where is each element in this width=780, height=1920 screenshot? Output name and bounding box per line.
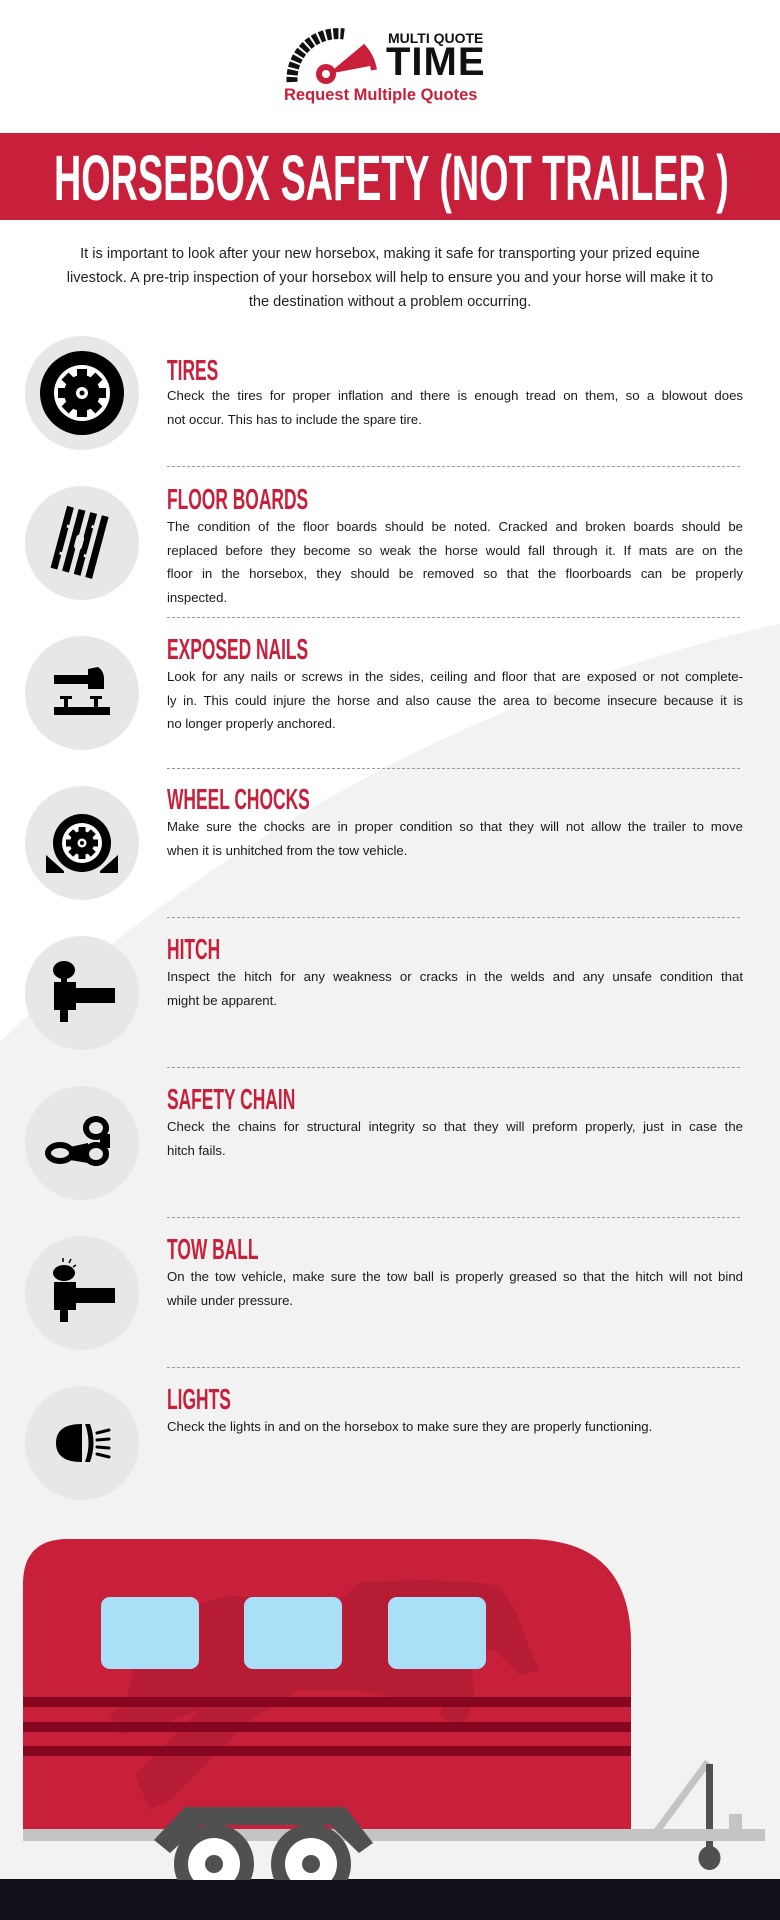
icon: wheel chocks <box>25 786 139 900</box>
stripes <box>23 1697 631 1756</box>
icon: lights <box>25 1386 139 1500</box>
icon: hitch <box>25 936 139 1050</box>
panel: safety chain: SAFETY CHAIN <box>167 1084 295 1116</box>
panel: hitch: Inspect the hitch for any weakness or cracks in the welds and any unsafe condition that <box>167 969 743 984</box>
panel: lights: Check the lights in and on the horsebox to make sure they are properly functioning. <box>167 1419 652 1434</box>
panel: tow ball: while under pressure. <box>167 1292 293 1308</box>
icon: floor boards <box>25 486 139 600</box>
trailer body <box>23 1539 631 1829</box>
panel: tow ball <box>167 1234 743 1308</box>
panel: wheel chocks: when it is unhitched from the tow vehicle. <box>167 842 407 858</box>
panel: floor boards: The condition of the floor boards should be noted. Cracked and broken boards should be <box>167 519 743 534</box>
panel: hitch <box>167 934 743 1008</box>
intro text: livestock. A pre-trip inspection of your horsebox will help to ensure you and your horse will make it to <box>67 270 713 286</box>
intro text <box>67 246 713 310</box>
panel: hitch: HITCH <box>167 934 220 966</box>
panel: floor boards: FLOOR BOARDS <box>167 484 308 516</box>
panel: tires <box>167 355 743 426</box>
panel: exposed nails: Look for any nails or screws in the sides, ceiling and floor that are exposed or not complete- <box>167 669 743 684</box>
icon: tow ball <box>25 1236 139 1350</box>
logo: MULTI QUOTE <box>388 30 483 46</box>
icons column <box>25 336 139 1500</box>
logo <box>284 28 486 104</box>
axle bracket <box>154 1807 373 1853</box>
panel: wheel chocks: Make sure the chocks are in proper condition so that they will not allow the trailer to move <box>167 819 743 834</box>
panel: safety chain <box>167 1084 743 1158</box>
panel: lights <box>167 1384 652 1434</box>
logo: TIME <box>386 40 486 84</box>
panel: exposed nails <box>167 634 743 731</box>
panel: tires: TIRES <box>167 355 218 387</box>
hitch stand <box>657 1762 742 1870</box>
panel: floor boards: inspected. <box>167 590 227 604</box>
chassis <box>23 1829 765 1841</box>
panel: tires: not occur. This has to include the spare tire. <box>167 412 422 426</box>
windows <box>101 1597 486 1669</box>
icon: exposed nails <box>25 636 139 750</box>
panel: exposed nails: EXPOSED NAILS <box>167 634 308 666</box>
panel: lights: LIGHTS <box>167 1384 231 1416</box>
panel: floor boards: floor in the horsebox, they should be removed so that the floorboards can be properly <box>167 566 743 581</box>
panel: safety chain: Check the chains for structural integrity so that they will preform properly, just in case the <box>167 1119 743 1134</box>
panel: tow ball: TOW BALL <box>167 1234 258 1266</box>
logo: Request Multiple Quotes <box>284 86 477 104</box>
panel: tow ball: On the tow vehicle, make sure the tow ball is properly greased so that the hitch will not bind <box>167 1269 743 1284</box>
panel: wheel chocks: WHEEL CHOCKS <box>167 784 310 816</box>
horsebox illustration <box>23 1539 765 1880</box>
wheels <box>174 1824 351 1904</box>
panel: exposed nails: no longer properly anchored. <box>167 716 336 731</box>
horse silhouette <box>110 1580 540 1810</box>
panel: tires: Check the tires for proper inflation and there is enough tread on them, so a blowout does <box>167 388 743 403</box>
icon: tire <box>25 336 139 450</box>
panel: safety chain: hitch fails. <box>167 1142 226 1158</box>
panel: exposed nails: ly in. This could injure the horse and also cause the area to become insecure because it is <box>167 692 743 708</box>
panel: floor boards <box>167 484 743 604</box>
panel: hitch: might be apparent. <box>167 992 277 1008</box>
icon: safety chain <box>25 1086 139 1200</box>
panel: floor boards: replaced before they become so weak the horse would fall through it. If mats are on the <box>167 542 743 558</box>
intro text: It is important to look after your new horsebox, making it safe for transporting your prized equine <box>80 246 700 262</box>
panel: wheel chocks <box>167 784 743 858</box>
intro text: the destination without a problem occurring. <box>249 294 531 310</box>
title bar: HORSEBOX SAFETY (NOT TRAILER ) <box>54 142 729 214</box>
